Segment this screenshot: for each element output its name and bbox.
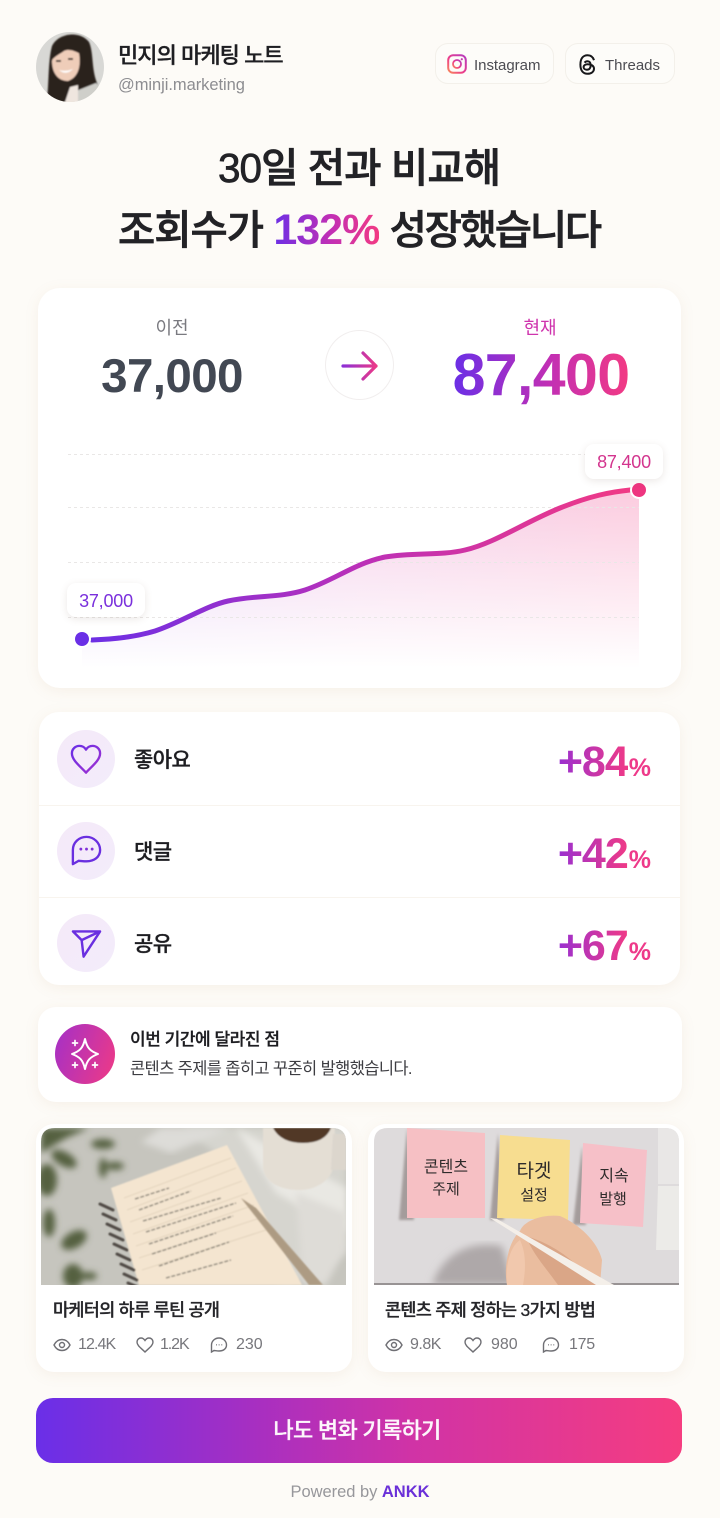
coffee mug bbox=[263, 1128, 346, 1190]
article title: 마케터의 하루 루틴 공개 bbox=[53, 1300, 219, 1320]
value: +67% bbox=[558, 922, 651, 970]
start value tag bbox=[67, 583, 145, 617]
panel: before and after comparison bbox=[38, 288, 681, 688]
before value: 37,000 bbox=[101, 350, 243, 403]
pen bbox=[241, 1198, 323, 1285]
views: 9.8K bbox=[410, 1336, 441, 1353]
article metrics bbox=[385, 1336, 595, 1353]
profile name: 민지의 마케팅 노트 bbox=[118, 43, 283, 68]
start point bbox=[74, 631, 90, 647]
label: 공유 bbox=[134, 933, 171, 956]
label: 좋아요 bbox=[134, 749, 190, 772]
stat row: shares bbox=[57, 914, 651, 972]
icon: comment bbox=[210, 1337, 228, 1353]
photo: sticky notes bbox=[374, 1128, 679, 1285]
likes: 1.2K bbox=[160, 1336, 189, 1353]
end point bbox=[631, 482, 647, 498]
title line 1: 30일 전과 비교해 bbox=[218, 145, 500, 191]
button label: 나도 변화 기록하기 bbox=[273, 1418, 441, 1443]
likes: 980 bbox=[491, 1336, 518, 1353]
label: Threads bbox=[605, 57, 660, 74]
before label: 이전 bbox=[155, 318, 189, 338]
current value: 87,400 bbox=[453, 342, 629, 408]
sticky note: target: 설정 bbox=[520, 1184, 548, 1205]
icon: heart bbox=[464, 1337, 482, 1353]
panel: what changed bbox=[38, 1007, 682, 1102]
heading: 이번 기간에 달라진 점 bbox=[130, 1030, 280, 1049]
end value tag bbox=[585, 444, 663, 479]
sticky note: content topic bbox=[407, 1128, 485, 1218]
title line 2: 조회수가 132% 성장했습니다 bbox=[118, 206, 600, 254]
sticky note: consistent publishing bbox=[580, 1143, 647, 1227]
value: +84% bbox=[558, 738, 651, 786]
call to action button bbox=[36, 1398, 682, 1463]
chart line bbox=[92, 490, 630, 640]
comments: 230 bbox=[236, 1336, 263, 1353]
line chart bbox=[68, 454, 646, 646]
avatar photo bbox=[36, 32, 104, 102]
comments: 175 bbox=[569, 1336, 595, 1353]
icon: instagram bbox=[447, 54, 467, 74]
icon: eye bbox=[53, 1338, 71, 1352]
label: 댓글 bbox=[134, 841, 171, 864]
icon: speech bubble bbox=[57, 822, 115, 880]
chart area bbox=[82, 485, 639, 668]
title bbox=[118, 145, 602, 254]
tag text: 87,400 bbox=[597, 452, 651, 472]
sticky note: content topic: 주제 bbox=[432, 1178, 460, 1199]
icon: paper plane bbox=[57, 914, 115, 972]
panel: engagement stats bbox=[39, 712, 680, 985]
stat row: likes bbox=[57, 730, 651, 788]
tag text: 37,000 bbox=[79, 591, 133, 611]
article card 1 bbox=[36, 1124, 352, 1372]
hand with pen bbox=[490, 1216, 614, 1285]
icon: eye bbox=[385, 1338, 403, 1352]
value: +42% bbox=[558, 830, 651, 878]
sticky note: consistent publishing: 발행 bbox=[599, 1188, 627, 1209]
notebook bbox=[100, 1145, 302, 1288]
article card 2 bbox=[368, 1124, 684, 1372]
icon: sparkle bbox=[55, 1024, 115, 1084]
current label: 현재 bbox=[523, 318, 557, 338]
button: Threads bbox=[565, 43, 675, 84]
icon: comment bbox=[542, 1337, 560, 1353]
sticky note: content topic: 콘텐츠 bbox=[424, 1153, 468, 1177]
icon: heart bbox=[136, 1337, 154, 1353]
label: Instagram bbox=[474, 57, 540, 74]
cast shadow bbox=[432, 1245, 514, 1285]
icon: threads bbox=[579, 54, 595, 75]
arrow icon bbox=[325, 330, 394, 400]
footer: powered by: Powered by ANKK bbox=[291, 1483, 429, 1501]
article metrics bbox=[53, 1336, 263, 1353]
stat row: comments bbox=[57, 822, 651, 880]
profile handle: @minji.marketing bbox=[118, 76, 245, 94]
article title: 콘텐츠 주제 정하는 3가지 방법 bbox=[385, 1300, 595, 1320]
icon: heart bbox=[57, 730, 115, 788]
sticky note: target: 타겟 bbox=[517, 1156, 551, 1183]
views: 12.4K bbox=[78, 1336, 115, 1353]
sticky note: consistent publishing: 지속 bbox=[599, 1162, 629, 1186]
photo: notebook and coffee bbox=[41, 1128, 346, 1285]
body text: 콘텐츠 주제를 좁히고 꾸준히 발행했습니다. bbox=[130, 1060, 412, 1078]
profile header bbox=[36, 32, 283, 102]
button: Instagram bbox=[435, 43, 554, 84]
sticky note: target bbox=[497, 1135, 570, 1220]
